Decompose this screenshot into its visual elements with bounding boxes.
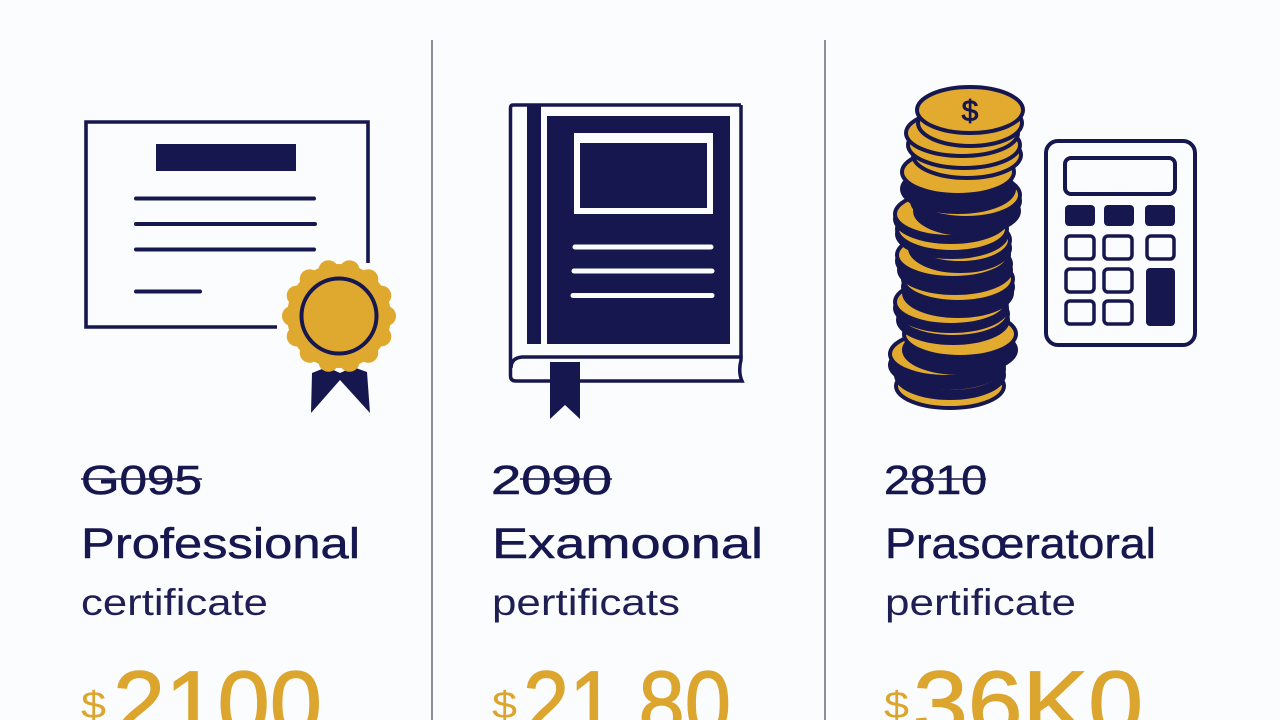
heading: Prasenatoral: Prasœratoral bbox=[885, 520, 1156, 568]
icon: book with bookmark bbox=[510, 105, 742, 419]
heading: Examoonal: Examoonal bbox=[492, 520, 763, 568]
icon: stack of coins bbox=[890, 87, 1023, 408]
year label: G095 bbox=[81, 457, 202, 503]
year label: 2090 bbox=[491, 457, 612, 503]
icon: calculator bbox=[1046, 141, 1195, 345]
panel: professional certificate bbox=[81, 122, 396, 720]
icon: dollar sign on top coin: $ bbox=[962, 95, 979, 128]
subheading: certificate: certificate bbox=[81, 582, 268, 623]
subheading: pertificats: pertificats bbox=[492, 582, 680, 623]
panel: examination certificate bbox=[491, 105, 763, 720]
panel: preparatory certificate bbox=[884, 87, 1195, 720]
heading: Professional: Professional bbox=[81, 520, 360, 568]
year label: 2810 bbox=[884, 457, 987, 503]
icon: certificate with rosette bbox=[86, 122, 396, 413]
subheading: pertificate: pertificate bbox=[885, 582, 1076, 623]
